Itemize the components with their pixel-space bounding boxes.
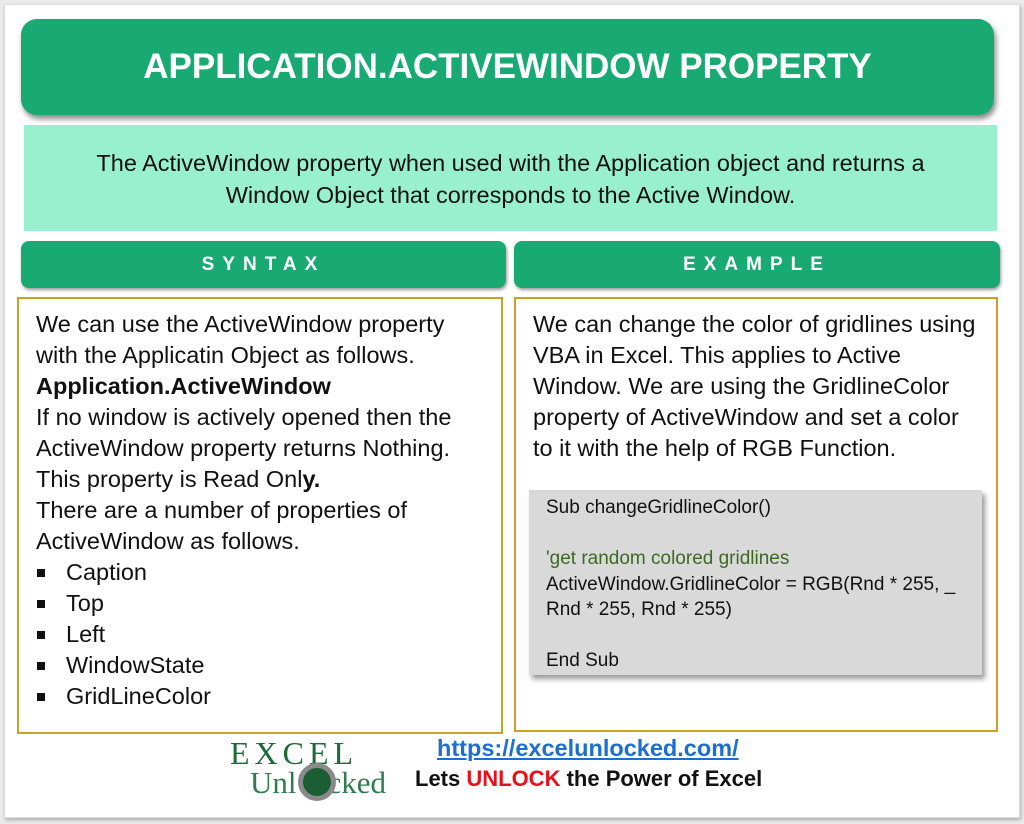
- logo: EXCEL: [230, 735, 358, 771]
- panel: syntax: We can use the ActiveWindow property: [36, 311, 444, 337]
- code block: End Sub: [546, 650, 619, 671]
- logo: [230, 735, 386, 801]
- panel: syntax: If no window is actively opened then the: [36, 404, 451, 430]
- property list: GridLineColor: [66, 683, 211, 709]
- panel: syntax: This property is Read Only.: [36, 466, 320, 492]
- description banner: [24, 125, 997, 231]
- syntax heading: SYNTAX: [202, 254, 325, 275]
- panel: example: to it with the help of RGB Function.: [533, 435, 896, 461]
- code block: ActiveWindow.GridlineColor = RGB(Rnd * 255, _: [546, 574, 955, 594]
- property list: WindowState: [66, 652, 204, 678]
- panel: syntax: with the Applicatin Object as follows.: [36, 342, 415, 368]
- website link: https://excelunlocked.com/: [437, 735, 739, 761]
- panel: example: We can change the color of gridlines using: [533, 311, 975, 337]
- property list: Top: [66, 590, 104, 616]
- code block: Sub changeGridlineColor(): [546, 497, 771, 518]
- example heading: [514, 241, 1000, 288]
- description banner: The ActiveWindow property when used with the Application object and returns a: [96, 150, 925, 176]
- syntax heading: [21, 241, 506, 288]
- panel: example: [514, 297, 998, 732]
- panel: example: property of ActiveWindow and set a color: [533, 404, 959, 430]
- title: APPLICATION.ACTIVEWINDOW PROPERTY: [143, 47, 872, 86]
- panel: syntax: ActiveWindow as follows.: [36, 528, 300, 554]
- panel: syntax: There are a number of properties of: [36, 497, 407, 523]
- icon: lock: [298, 763, 336, 801]
- title: [21, 19, 994, 115]
- property list: [37, 559, 211, 709]
- code block: Rnd * 255, Rnd * 255): [546, 599, 732, 620]
- code block: 'get random colored gridlines: [546, 548, 789, 569]
- panel: syntax: [17, 297, 503, 734]
- code block: [529, 490, 982, 675]
- panel: syntax: ActiveWindow property returns Nothing.: [36, 435, 450, 461]
- panel: example: Window. We are using the GridlineColor: [533, 373, 949, 399]
- property list: Left: [66, 621, 105, 647]
- description banner: Window Object that corresponds to the Active Window.: [226, 182, 795, 208]
- tagline: Lets UNLOCK the Power of Excel: [415, 766, 762, 791]
- property list: Caption: [66, 559, 147, 585]
- panel: syntax: Application.ActiveWindow: [36, 373, 331, 399]
- logo: Unl cked: [250, 765, 386, 800]
- example heading: EXAMPLE: [683, 254, 831, 275]
- panel: example: VBA in Excel. This applies to Active: [533, 342, 901, 368]
